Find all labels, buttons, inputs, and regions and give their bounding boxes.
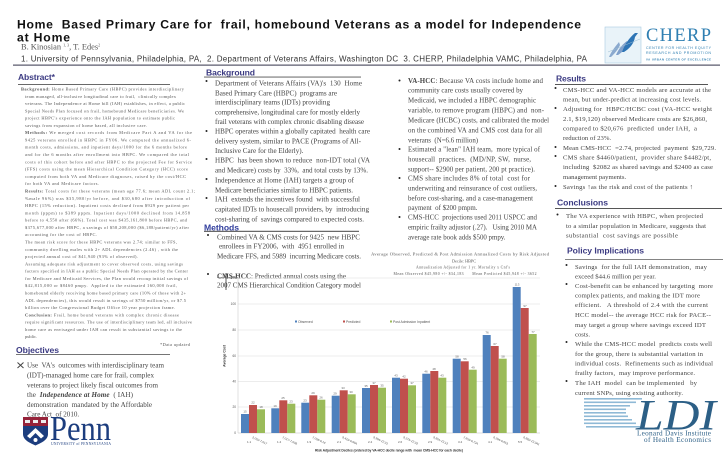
bar value labels: 37 bbox=[410, 381, 414, 385]
panel: VA-HCC methods continued: payment of $200 pmpm. bbox=[408, 205, 478, 212]
panel: policy implications: exceed $44.6 million per year. bbox=[575, 273, 656, 280]
x axis category labels: 6,294-9,653 bbox=[493, 435, 509, 446]
y axis labels: 0 bbox=[234, 431, 236, 435]
panel: background bbox=[204, 68, 371, 223]
panel: abstract: team managed, all-inclusive longitudinal care to frail, clinically complex bbox=[25, 94, 177, 100]
observed bars bbox=[241, 287, 521, 433]
panel: VA-HCC methods continued: before cost-sharing, and a case-management bbox=[408, 195, 533, 202]
panel: VA-HCC methods continued: support-- $2900 per patient, 200 pt practice). bbox=[408, 166, 535, 173]
x axis category labels: 3.4 bbox=[458, 440, 463, 444]
authors: , T. Edes bbox=[69, 42, 98, 52]
y axis labels: 120 bbox=[231, 276, 236, 280]
x axis category labels: 7,017-7,008 bbox=[282, 435, 298, 446]
panel: policy implications: individual costs. Refinements such as individual bbox=[575, 360, 713, 367]
bar value labels: 25 bbox=[281, 396, 285, 400]
bar value labels: 33 bbox=[341, 386, 345, 390]
authors: 2 bbox=[98, 42, 100, 48]
y axis labels: 80 bbox=[232, 328, 236, 332]
x axis category labels: 6,882-13,041 bbox=[523, 435, 541, 447]
panel: methods: 2007 CMS Hierarchical Condition Category model bbox=[217, 282, 361, 290]
panel: abstract: $375,677,000 after HBPC, a savings of $58,208,000 ($6,188/patient/yr) after bbox=[25, 225, 190, 231]
panel: abstract: $42,815,000 or $8460 pmpy. Applied to the estimated 160,000 frail, bbox=[25, 283, 177, 289]
bar value labels: 58 bbox=[455, 354, 459, 358]
logo: CHERP: RESEARCH AND PROMOTION bbox=[646, 51, 711, 55]
panel: background: HBPC operates within a globally capitated health care bbox=[215, 128, 370, 136]
panel: objectives: Objectives bbox=[16, 345, 59, 355]
panel: background: and Medicare) costs by 33%, and total costs by 13%. bbox=[215, 166, 368, 174]
panel: conclusions: Conclusions bbox=[557, 198, 608, 208]
panel: abstract: 9425 veterans enrolled in HBPC in FY06. We computed the annualized 6- bbox=[25, 138, 192, 142]
panel: abstract: home care as envisaged under IAH can result in substantial savings to the bbox=[25, 327, 182, 332]
panel: objectives: (IDT)-managed home care for frail, complex bbox=[27, 372, 154, 380]
panel: background: HBPC has been shown to reduce non-IDT total (VA bbox=[215, 156, 371, 164]
bar value labels: 42 bbox=[402, 374, 406, 378]
panel: VA-HCC methods continued: Medicaid, we included a HBPC demographic bbox=[408, 98, 536, 104]
panel: background: cost-sharing of savings compared to expected costs. bbox=[215, 215, 364, 223]
bar value labels: 113 bbox=[515, 282, 520, 286]
panel: policy implications: Savings for the full IAH demonstration, may bbox=[575, 264, 708, 271]
panel: VA-HCC methods continued: variable, to remove program (HBPC) and non- bbox=[408, 108, 545, 114]
panel: VA-HCC methods continued: average rate book adds $500 pmpy. bbox=[408, 234, 506, 241]
bar value labels: 26 bbox=[319, 396, 323, 400]
post admission bars bbox=[257, 334, 537, 433]
panel: policy implications: While the CMS-HCC model predicts costs well bbox=[575, 341, 712, 348]
bar value labels: 43 bbox=[440, 374, 444, 378]
y axis title: Average Cost bbox=[222, 344, 226, 367]
chart heading: Annualization Adjusted for 1 yr. Mortality x Cnf's bbox=[416, 266, 511, 270]
panel: policy implications: HCC model-- the average HCC risk for PACE-- bbox=[575, 312, 711, 319]
panel: abstract: Assuming adequate risk adjustment to cover observed costs, using savings bbox=[25, 261, 183, 267]
x axis category labels bbox=[247, 435, 541, 447]
panel: results: Mean CMS-HCC =2.74, projected payment $29,729. bbox=[563, 145, 716, 152]
panel: objectives bbox=[16, 345, 170, 418]
bar value labels: 67 bbox=[493, 342, 497, 346]
panel: results: mean, but under-predict at increasing cost levels. bbox=[563, 96, 701, 103]
panel: results bbox=[554, 74, 716, 191]
panel: policy implications: for the group, there is substantial variation in bbox=[575, 351, 704, 358]
panel: abstract: The mean risk score for these HBPC veterans was 2.74; similar to FFS, bbox=[25, 240, 177, 246]
panel: conclusions: The VA experience with HBPC, when projected bbox=[566, 213, 704, 220]
x axis category labels: 1.9 bbox=[307, 440, 312, 444]
y axis labels: 40 bbox=[232, 380, 236, 384]
bar value labels: 77 bbox=[531, 330, 535, 334]
bar value labels: 29 bbox=[333, 392, 337, 396]
panel: abstract: savings from expansion of home based, all inclusive care. bbox=[25, 123, 147, 129]
panel: objectives: the Independence at Home ( IAH) bbox=[27, 391, 134, 399]
panel: policy implications: frailty factors, may improve performance. bbox=[575, 370, 695, 377]
bar value labels: 29 bbox=[311, 391, 315, 395]
panel: results: including $2082 as shared savings and $2400 as case bbox=[563, 164, 713, 171]
legend: Post Admission Inpatient bbox=[393, 320, 430, 324]
panel: abstract: Results: Total costs for these veterans (mean age 77.6; mean ADL count 2.1; bbox=[25, 188, 195, 194]
panel: abstract: costs of this cohort before and after HBPC to the projected Fee for Service bbox=[25, 159, 192, 164]
logo: CHERP bbox=[605, 26, 712, 63]
panel: abstract: billion over the Congressional Budget Office 10 year projection frame. bbox=[25, 305, 175, 310]
panel: methods: CMS-HCC: Predicted annual costs using the bbox=[217, 272, 346, 280]
logo: CHERP: VA URBAN CENTER OF EXCELLENCE bbox=[646, 58, 711, 62]
panel: abstract: for both VA and Medicare factors. bbox=[25, 181, 99, 186]
bar value labels: 23 bbox=[289, 400, 293, 404]
logo: Penn: UNIVERSITY of PENNSYLVANIA bbox=[51, 442, 111, 446]
authors: 1, 3 bbox=[63, 42, 69, 48]
panel: background: frail veterans with complex chronic disabling disease bbox=[215, 118, 364, 126]
panel: abstract: community dwelling males with 2+ ADL dependencies (2.46) , with the bbox=[25, 247, 178, 253]
panel: abstract: *Data updated bbox=[160, 342, 191, 347]
panel: results: reduction of 23%. bbox=[563, 135, 611, 142]
bar value labels: 37 bbox=[372, 381, 376, 385]
panel: conclusions bbox=[555, 198, 722, 239]
x axis category labels: 9,994-12,01 bbox=[373, 435, 389, 446]
bar value labels: 49 bbox=[471, 366, 475, 370]
panel: abstract: (FFS) costs using the mean Hierarchical Condition Category (HCC) score bbox=[25, 167, 188, 172]
panel: methods: Medicare FFS, and 5989 incurring Medicare costs. bbox=[217, 252, 361, 260]
panel: conclusions: to a similar population in Medicare, suggests that bbox=[566, 223, 706, 230]
y axis labels: 60 bbox=[232, 354, 236, 358]
panel: background: comprehensive, longitudinal care for mostly elderly bbox=[215, 108, 360, 116]
x axis category labels: 4.1 bbox=[488, 440, 493, 444]
panel: methods: Combined VA & CMS costs for 9425 new HBPC bbox=[217, 234, 360, 242]
bar value labels bbox=[243, 282, 535, 414]
panel: abstract: ADL dependencies), this would result in savings of $750 million/yr, or $7.5 bbox=[25, 298, 187, 304]
panel: abstract: accounting for the cost of HBPC. bbox=[25, 232, 97, 237]
panel: abstract: Conclusion: Frail, home bound veterans with complex chronic disease bbox=[25, 312, 179, 318]
x axis category labels: 9,275-12,02 bbox=[403, 435, 419, 446]
logo: CHERP: CHERP bbox=[646, 26, 711, 46]
logo: LDI: Leonard Davis Institute bbox=[637, 430, 711, 438]
panel: abstract: project HBPC's experience onto the IAH population to estimate public bbox=[25, 116, 175, 121]
chart heading: Average Observed, Predicted & Post Admission Annualized Costs by Risk Adjusted bbox=[371, 252, 550, 258]
bar value labels: 30 bbox=[349, 390, 353, 394]
panel: policy implications: complex patients, and making the IDT more bbox=[575, 292, 700, 299]
panel: policy implications: current SNPs, using existing authority. bbox=[575, 390, 683, 397]
bar value labels: 19 bbox=[273, 404, 277, 408]
x axis category labels: 2.4 bbox=[368, 440, 373, 444]
panel: conclusions: substantial cost savings are possible bbox=[566, 232, 678, 239]
panel: abstract: factors specified in IAH as a public Special Needs Plan operated by the Center bbox=[25, 269, 189, 274]
panel: background: interdisciplinary teams (IDTs) providing bbox=[215, 98, 330, 106]
x axis category labels: 7,008-9,14 bbox=[312, 435, 327, 445]
panel: methods: enrollees in FY2006, with 4951 enrolled in bbox=[219, 242, 344, 250]
x axis category labels: 7,653-9,724 bbox=[463, 435, 479, 446]
panel: background: delivery system, similar to PACE (Programs of All- bbox=[215, 137, 362, 145]
panel: objectives: Use VA's outcomes with interdisciplinary team bbox=[27, 362, 164, 370]
panel: abstract: month costs, admissions, and inpatient days/1000 for the 6 months before bbox=[25, 145, 187, 151]
panel: background: capitated IDTs to housecall providers, by introducing bbox=[215, 205, 369, 213]
bar value labels: 22 bbox=[251, 400, 255, 404]
panel: results: Savings ↑as the risk and cost of the patients ↑ bbox=[563, 184, 693, 191]
logo: Penn bbox=[23, 409, 111, 448]
panel: methods bbox=[204, 222, 361, 290]
x axis category labels: 9,801-13,12 bbox=[433, 435, 449, 446]
panel: policy implications bbox=[565, 246, 723, 397]
panel: VA-HCC methods continued: empiric frailty adjustor (.27). Using 2010 MA bbox=[408, 224, 537, 231]
chart heading: Mean Observed $45,980 +/- $34,183 Mean Predicted $45,948 +/- 3652 bbox=[394, 272, 537, 277]
panel: VA-HCC methods continued: Estimated a "lean" IAH team, more typical of bbox=[408, 146, 541, 154]
panel: background: Medicare beneficiaries similar to HBPC patients. bbox=[215, 186, 353, 194]
bar value labels: 18 bbox=[259, 405, 263, 409]
panel: results: CMS-HCC and VA-HCC models are accurate at the bbox=[563, 87, 711, 94]
panel: VA-HCC methods continued: community care costs usually covered by bbox=[408, 88, 524, 94]
panel: VA-HCC methods continued bbox=[398, 78, 549, 241]
bar value labels: 46 bbox=[424, 370, 428, 374]
authors: B. Kinosian bbox=[21, 42, 61, 52]
panel: policy implications: Cost-benefit can be enhanced by targeting more bbox=[575, 283, 713, 290]
x axis category labels: 2.6 bbox=[398, 440, 403, 444]
x axis category labels: 2.9 bbox=[428, 440, 433, 444]
logo: Penn: Penn bbox=[50, 409, 111, 448]
panel: methods: Methods bbox=[204, 222, 239, 232]
panel: abstract: before to 4,550 after (66%). Total cost was $435,161,800 before HBPC, and bbox=[25, 218, 188, 224]
panel: background: Background bbox=[206, 68, 255, 78]
title: Home Based Primary Care for frail, homebound Veterans as a model for Independence bbox=[17, 18, 581, 32]
panel: abstract: Special Needs Plan focused on frail, homebound Medicare beneficiaries. We bbox=[25, 108, 184, 114]
panel: VA-HCC methods continued: CMS-HCC projections used 2011 USPCC and bbox=[408, 214, 538, 222]
chart heading: Decile: HBPC bbox=[452, 258, 476, 264]
bar value labels: 58 bbox=[501, 354, 505, 358]
chart heading bbox=[371, 252, 550, 277]
panel: background: Based Primary Care (HBPC) programs are bbox=[215, 89, 337, 97]
panel: background: Independence at Home (IAH) targets a group of bbox=[215, 176, 355, 184]
title bbox=[17, 18, 581, 44]
y axis labels: 20 bbox=[232, 405, 236, 409]
panel: abstract: Background: Home Based Primary Care (HBPC) provides interdisciplinary bbox=[21, 86, 185, 92]
panel: VA-HCC methods continued: housecall practices. (MD/NP, SW, nurse, bbox=[408, 156, 531, 164]
x axis category labels: 9,423-9,994 bbox=[342, 435, 358, 446]
panel: VA-HCC methods continued: CMS share includes 8% of total cost for bbox=[408, 176, 531, 182]
logo: CHERP: CENTER FOR HEALTH EQUITY bbox=[646, 46, 712, 50]
panel: abstract: projected annual cost of $41,940 (93% of observed). bbox=[25, 254, 138, 260]
x axis category labels: 2,002-7,017 bbox=[252, 435, 268, 446]
logo: LDI: LDI bbox=[635, 392, 718, 440]
panel: objectives: demonstration mandated by the Affordable bbox=[27, 401, 152, 409]
panel: abstract: Methods: We merged cost records from Medicare Part A and VA for the bbox=[25, 130, 192, 135]
affiliations: 1. University of Pennsylvania, Philadelphia, PA, 2. Department of Veterans Affairs, Washington DC 3. CHERP, Philadelphia VAMC, Philadelphia, PA bbox=[21, 54, 588, 64]
logo: LDI bbox=[584, 392, 718, 444]
predicted bars bbox=[249, 308, 529, 433]
bar value labels: 23 bbox=[303, 398, 307, 402]
panel: background: Inclusive Care for the Elderly). bbox=[215, 147, 304, 155]
panel: abstract: require significant resources. The use of interdisciplinary team led, all inclusive bbox=[25, 320, 192, 326]
panel: background: Department of Veterans Affairs (VA)'s 130 Home bbox=[215, 80, 362, 88]
panel: objectives: veterans to project likely fiscal outcomes from bbox=[27, 381, 158, 389]
logo: LDI: of Health Economics bbox=[644, 436, 711, 444]
panel: VA-HCC methods continued: veterans (N=6.6 million) bbox=[408, 137, 478, 144]
y axis labels: 100 bbox=[231, 302, 236, 306]
bar value labels: 43 bbox=[394, 374, 398, 378]
panel: abstract: HBPC (15% reduction). Inpatient costs declined from $929 per patient per bbox=[25, 203, 190, 208]
panel: abstract: %male 96%) was $35,980/yr before, and $30,680 after introduction of bbox=[25, 196, 191, 202]
panel: abstract: for Medicare and Medicaid Services, the Plan would recoup initial savings of bbox=[25, 276, 189, 282]
bar value labels: 35 bbox=[380, 384, 384, 388]
panel: abstract: veterans. The Independence at Home bill (IAH) establishes, in effect, a public bbox=[25, 101, 185, 107]
panel: policy implications: The IAH model can be implemented by bbox=[575, 380, 698, 387]
panel: policy implications: may target a group where savings exceed IDT bbox=[575, 322, 706, 329]
panel: abstract: public. bbox=[25, 334, 37, 339]
panel: abstract: month (pppm) to $389 pppm. Inpatient days/1000 declined from 14,858 bbox=[25, 210, 191, 216]
panel: results: 2.1, $19,120) observed Medicare costs are $26,860, bbox=[563, 116, 707, 123]
legend bbox=[295, 320, 430, 324]
icon: x bullet bbox=[18, 362, 24, 368]
panel: policy implications: Policy Implications bbox=[567, 246, 644, 256]
title: at Home bbox=[17, 30, 70, 44]
panel: background: IAH extends the incentives found with successful bbox=[215, 196, 360, 204]
x axis category labels: 2.1 bbox=[337, 440, 342, 444]
panel: abstract: computed from both VA and Medicare diagnoses, raised by the cost/HCC bbox=[25, 174, 186, 180]
panel: abstract bbox=[18, 72, 195, 347]
panel: results: CMS share $4460/patient, provider share $4482/pt, bbox=[563, 154, 711, 161]
panel: VA-HCC methods continued: Medicare (HCBC) costs, and calibrated the model bbox=[408, 118, 549, 124]
panel: policy implications: costs. bbox=[575, 331, 590, 338]
panel: results: management payments. bbox=[563, 174, 626, 181]
legend: Predicted bbox=[346, 320, 360, 324]
panel: abstract: and for the 6 months after enrollment into HBPC. We compared the total bbox=[25, 152, 190, 157]
bar chart bbox=[222, 276, 541, 452]
panel: abstract: homebound elderly receiving home based primary care (10% of those with 2+ bbox=[25, 290, 187, 296]
x axis title: Risk Adjustment Deciles (ordered by VA-HCC decile range with mean CMS-HCC for each decile) bbox=[315, 448, 463, 452]
panel: results: compared to $20,676 predicted under IAH, a bbox=[563, 125, 697, 132]
bar value labels: 76 bbox=[485, 330, 489, 334]
panel: VA-HCC methods continued: on the combined VA and CMS cost data for all bbox=[408, 127, 542, 134]
bar value labels: 35 bbox=[364, 384, 368, 388]
y axis labels bbox=[231, 276, 236, 435]
panel: objectives: Care Act of 2010. bbox=[27, 410, 79, 418]
legend: Observed bbox=[298, 320, 313, 324]
panel: results: Adjusting for HBPC/HCBC cost (VA-HCC weight bbox=[563, 106, 712, 113]
panel: policy implications: efficient. A threshold of 2.4 with the current bbox=[575, 302, 708, 309]
bar value labels: 97 bbox=[523, 304, 527, 308]
bar value labels: 15 bbox=[243, 410, 247, 414]
bar value labels: 56 bbox=[463, 357, 467, 361]
panel: VA-HCC methods continued: underwriting and reinsurance of cost outliers, bbox=[408, 186, 537, 192]
panel: VA-HCC methods continued: VA-HCC: Because VA costs include home and bbox=[408, 78, 544, 85]
panel: abstract: Abstract* bbox=[18, 72, 56, 82]
x axis category labels: 5.5 bbox=[518, 440, 523, 444]
x axis category labels: 1.1 bbox=[247, 440, 252, 444]
bar value labels: 48 bbox=[432, 367, 436, 371]
x axis category labels: 1.4 bbox=[277, 440, 282, 444]
panel: results: Results bbox=[556, 74, 586, 84]
